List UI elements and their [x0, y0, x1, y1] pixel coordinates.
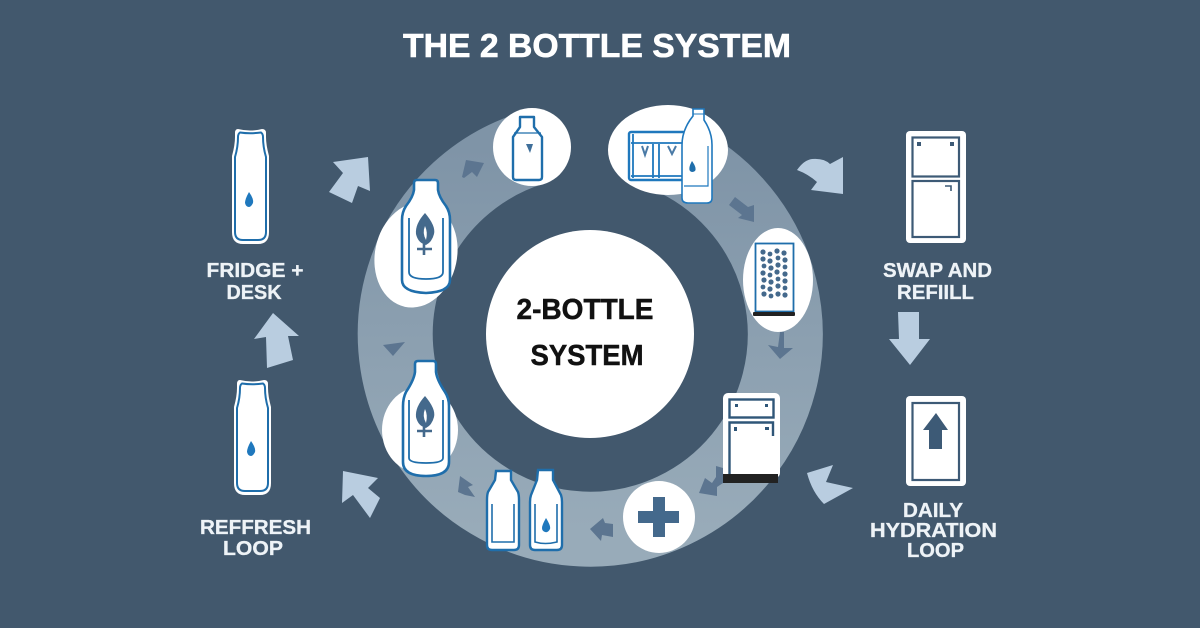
ring arrow: bottom left: [458, 476, 475, 497]
label: refresh loop: LOOP: [223, 537, 283, 560]
label: refresh loop: REFFRESH: [200, 516, 311, 539]
outer arrow: lower left: [342, 471, 380, 518]
step: two bottles: [487, 470, 562, 550]
label: daily hydration loop: [870, 499, 997, 562]
label: daily hydration loop: DAILY: [903, 499, 963, 522]
outer arrow: left up: [254, 313, 299, 368]
label: swap and refill: REFIILL: [897, 281, 974, 304]
step: top bottle in circle: [493, 108, 571, 186]
label: fridge + desk: [206, 259, 304, 304]
outer arrow: top left: [329, 157, 370, 203]
label: daily hydration loop: HYDRATION: [870, 519, 997, 542]
step: upper left bottle with leaf: [365, 180, 467, 315]
step: right filter panel: [743, 228, 813, 332]
title: THE 2 BOTTLE SYSTEM: [403, 27, 791, 64]
ring arrow: right: [768, 332, 793, 359]
icon: door with up arrow: [906, 396, 966, 486]
ring arrow: upper right: [729, 197, 754, 222]
step: lower left bottle with leaf: [382, 361, 458, 476]
center circle: [486, 230, 694, 438]
cycle ring: [395, 148, 785, 529]
label: fridge + desk: DESK: [226, 281, 282, 304]
step: upper right fridge and bottle: [608, 105, 728, 203]
outer arrow: lower right: [807, 465, 853, 504]
center circle: 2-BOTTLE: [516, 294, 654, 326]
center circle: SYSTEM: [530, 340, 644, 372]
ring arrow: top left: [462, 160, 484, 178]
label: fridge + desk: FRIDGE +: [206, 259, 304, 282]
outer arrow: top right: [797, 157, 843, 194]
label: swap and refill: [883, 259, 992, 304]
outer arrow: right down: [889, 312, 930, 365]
label: refresh loop: [200, 516, 311, 560]
ring arrow: bottom: [590, 518, 613, 541]
icon: fridge: [906, 131, 966, 243]
icon: left bottle lower: [234, 380, 271, 495]
label: swap and refill: SWAP AND: [883, 259, 992, 282]
label: daily hydration loop: LOOP: [907, 539, 964, 562]
ring arrow: lower right: [699, 466, 723, 496]
icon: left bottle upper: [232, 129, 269, 244]
step: lower right fridge: [723, 393, 780, 483]
step: plus circle: [623, 481, 695, 553]
ring arrow: left: [383, 342, 405, 356]
